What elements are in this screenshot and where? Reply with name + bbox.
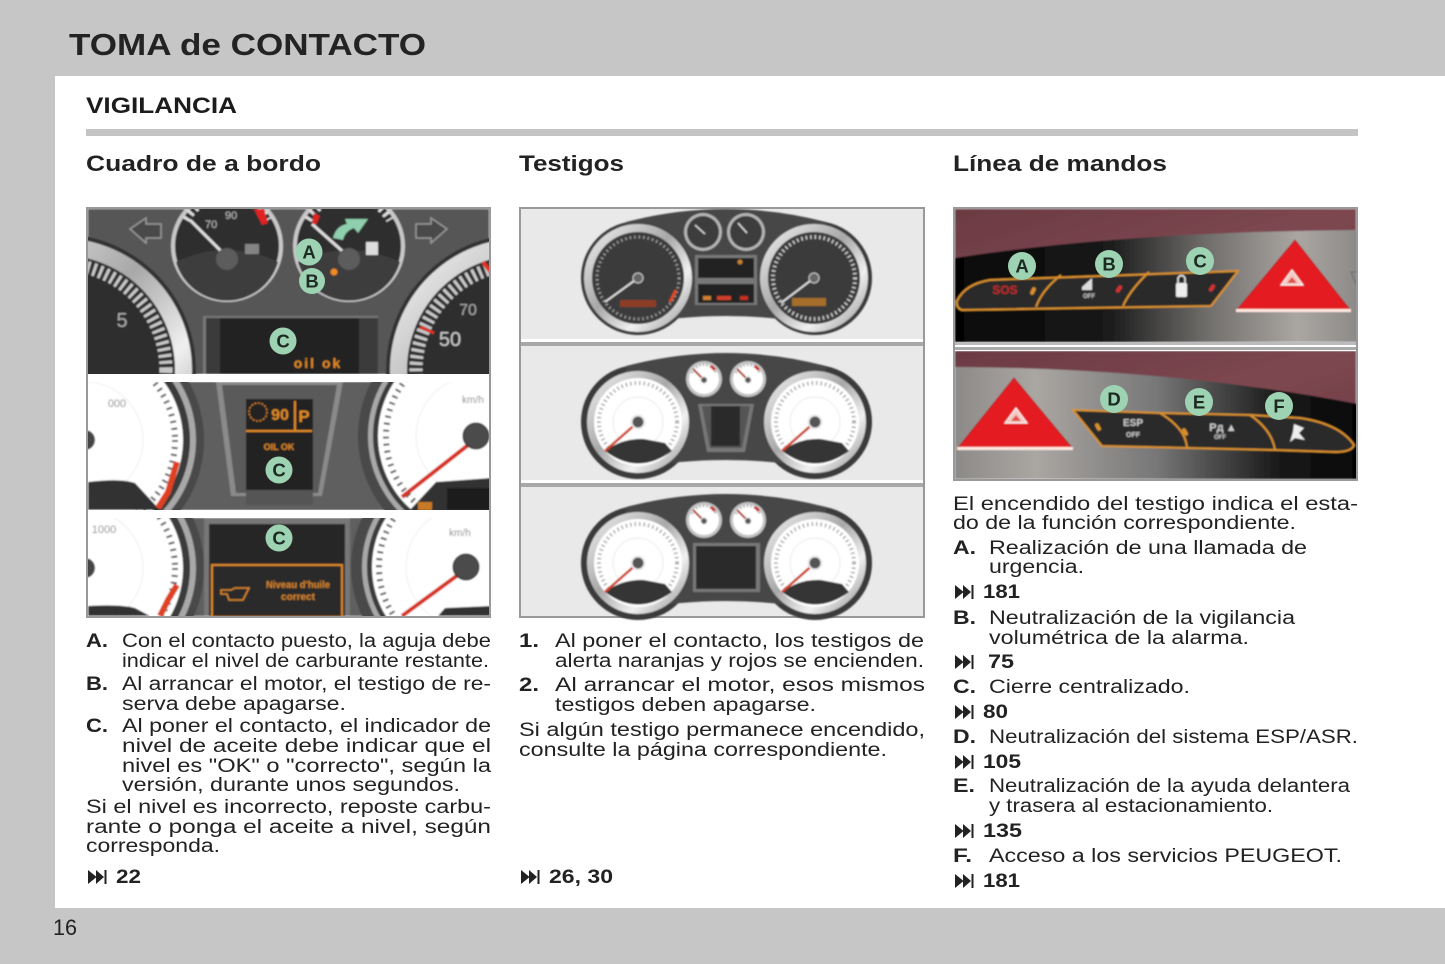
- marker D button: D: [1107, 388, 1121, 410]
- strip: buttons D E F and hazard: [955, 351, 1358, 479]
- item B: vigilancia volumétrica: volumétrica de la alarma.: [989, 627, 1249, 649]
- strip: oil ok display: 000: [108, 398, 126, 410]
- strip: niveau d'huile display: Niveau d'huile: [266, 580, 330, 591]
- page reference: 22: [88, 866, 141, 888]
- text block: cuadro list: indicar el nivel de carburante restante.: [122, 650, 489, 672]
- text block: cuadro list: Con el contacto puesto, la aguja debe: [122, 630, 491, 652]
- marker C middle: C: [272, 460, 286, 480]
- item A: llamada de urgencia: A.: [953, 537, 976, 559]
- text block: cuadro list: rante o ponga el aceite a nivel, según: [86, 816, 491, 838]
- panel: cuadro de a bordo photos: [86, 207, 491, 618]
- cluster 1: dark dials: [581, 209, 872, 335]
- item F: servicios PEUGEOT: Acceso a los servicios PEUGEOT.: [989, 845, 1342, 867]
- strip: analog gauges with A B C: [88, 209, 489, 374]
- marker C top: [270, 328, 296, 354]
- text block: cuadro list: nivel es "OK" o "correcto", según la: [122, 755, 491, 777]
- strip: oil ok display: 90: [271, 407, 289, 424]
- item B: vigilancia volumétrica: 75: [988, 651, 1014, 673]
- item B: vigilancia volumétrica: Neutralización de la vigilancia: [989, 607, 1295, 629]
- item D: ESP/ASR: Neutralización del sistema ESP/ASR.: [989, 726, 1358, 748]
- cluster 3: white dials, large display: [581, 494, 872, 620]
- column heading: línea de mandos: Línea de mandos: [953, 151, 1167, 176]
- item F: servicios PEUGEOT: [953, 845, 1342, 892]
- marker A button: [1008, 252, 1036, 280]
- page title: TOMA de CONTACTO: [69, 28, 426, 62]
- marker D button: [1100, 385, 1128, 413]
- strip: analog gauges with A B C: 90: [225, 210, 237, 222]
- strip: niveau d'huile display: 1000: [92, 524, 116, 536]
- marker C bottom: C: [272, 528, 286, 548]
- marker C middle: [266, 456, 292, 484]
- item F: servicios PEUGEOT: F.: [953, 845, 972, 867]
- text block: mandos intro: do de la función correspondiente.: [953, 512, 1296, 534]
- item A: llamada de urgencia: urgencia.: [989, 556, 1084, 578]
- panel: línea de mandos photos: [954, 208, 1358, 480]
- item A: llamada de urgencia: [953, 537, 1307, 603]
- strip: buttons D E F and hazard: Pд ▲: [1209, 422, 1237, 434]
- item A: llamada de urgencia: Realización de una llamada de: [989, 537, 1307, 559]
- item B: vigilancia volumétrica: B.: [953, 607, 976, 629]
- panel: testigos instrument clusters: [520, 208, 924, 620]
- item B: vigilancia volumétrica: [953, 607, 1295, 673]
- page reference: 22: 22: [116, 866, 141, 888]
- strip: oil ok display: [88, 382, 489, 510]
- cluster 2: white dials, small display: [581, 353, 872, 479]
- text block: testigos list: testigos deben apagarse.: [555, 694, 816, 716]
- marker F button: F: [1273, 396, 1285, 416]
- strip: niveau d'huile display: km/h: [449, 528, 471, 539]
- item E: ayuda al estacionamiento: y trasera al estacionamiento.: [989, 795, 1273, 817]
- item D: ESP/ASR: D.: [953, 726, 976, 748]
- item A: llamada de urgencia: 181: [983, 581, 1020, 603]
- text block: testigos list: Al arrancar el motor, esos mismos: [555, 674, 925, 696]
- text block: cuadro list: versión, durante unos segundos.: [122, 774, 460, 796]
- marker C bottom: [266, 524, 292, 552]
- section heading: VIGILANCIA: [86, 93, 237, 118]
- item E: ayuda al estacionamiento: E.: [953, 775, 975, 797]
- text block: testigos list: Al poner el contacto, los testigos de: [555, 630, 924, 652]
- marker B button: [1095, 250, 1123, 278]
- marker C top: C: [276, 330, 290, 352]
- text block: testigos list: [519, 630, 925, 761]
- strip: buttons A B C and hazard: OFF: [1083, 294, 1095, 300]
- item D: ESP/ASR: 105: [983, 751, 1021, 773]
- strip: buttons A B C and hazard: [955, 209, 1358, 342]
- marker E button: E: [1193, 392, 1205, 412]
- marker B button: B: [1102, 254, 1116, 274]
- marker B: [299, 268, 325, 294]
- strip: buttons D E F and hazard: ESP: [1123, 418, 1143, 429]
- strip: niveau d'huile display: correct: [281, 592, 316, 603]
- item E: ayuda al estacionamiento: Neutralización de la ayuda delantera: [989, 775, 1350, 797]
- text block: cuadro list: serva debe apagarse.: [122, 693, 346, 715]
- item C: cierre centralizado: Cierre centralizado.: [989, 676, 1190, 698]
- text block: mandos intro: El encendido del testigo indica el esta-: [953, 493, 1358, 515]
- marker E button: [1185, 388, 1213, 416]
- strip: niveau d'huile display: [88, 518, 489, 616]
- text block: cuadro list: corresponda.: [86, 835, 220, 857]
- page number: 16: [53, 915, 77, 940]
- marker A: A: [302, 242, 316, 262]
- text block: cuadro list: nivel de aceite debe indicar que el: [122, 735, 491, 757]
- strip: oil ok display: OIL OK: [264, 442, 295, 452]
- marker B: B: [305, 270, 319, 292]
- strip: buttons A B C and hazard: SOS: [992, 283, 1018, 297]
- text block: cuadro list: Al poner el contacto, el indicador de: [122, 715, 491, 737]
- marker C button: [1186, 247, 1214, 275]
- strip: analog gauges with A B C: 70: [459, 302, 477, 319]
- text block: cuadro list: Si el nivel es incorrecto, reposte carbu-: [86, 796, 491, 818]
- text block: cuadro list: Al arrancar el motor, el testigo de re-: [122, 673, 491, 695]
- column heading: testigos: Testigos: [519, 151, 624, 176]
- text block: testigos list: alerta naranjas y rojos se encienden.: [555, 650, 924, 672]
- strip: buttons D E F and hazard: OFF: [1126, 432, 1141, 439]
- item E: ayuda al estacionamiento: [953, 775, 1350, 842]
- text block: cuadro list: A.: [86, 630, 108, 652]
- page reference: 26, 30: [521, 866, 613, 888]
- marker C button: C: [1193, 250, 1207, 272]
- text block: testigos list: 2.: [519, 674, 539, 696]
- page reference: 26, 30: 26, 30: [549, 866, 613, 888]
- item C: cierre centralizado: C.: [953, 676, 976, 698]
- strip: analog gauges with A B C: 70: [205, 219, 217, 231]
- strip: oil ok display: km/h: [462, 395, 484, 406]
- marker A button: A: [1015, 256, 1029, 276]
- strip: oil ok display: P: [298, 407, 310, 426]
- text block: testigos list: 1.: [519, 630, 539, 652]
- marker F button: [1265, 392, 1293, 420]
- strip: analog gauges with A B C: oil ok: [294, 355, 342, 371]
- strip: analog gauges with A B C: 5: [116, 310, 128, 332]
- item D: ESP/ASR: [953, 726, 1358, 773]
- item F: servicios PEUGEOT: 181: [983, 870, 1020, 892]
- column heading: cuadro: Cuadro de a bordo: [86, 151, 321, 176]
- text block: cuadro list: B.: [86, 673, 108, 695]
- item C: cierre centralizado: [953, 676, 1190, 723]
- text block: cuadro list: [86, 630, 491, 857]
- text block: cuadro list: C.: [86, 715, 108, 737]
- marker A: [296, 238, 322, 266]
- text block: testigos list: Si algún testigo permanece encendido,: [519, 719, 925, 741]
- item C: cierre centralizado: 80: [983, 701, 1008, 723]
- text block: mandos intro: [953, 493, 1358, 534]
- text block: testigos list: consulte la página correspondiente.: [519, 739, 887, 761]
- strip: buttons D E F and hazard: OFF: [1214, 435, 1226, 441]
- strip: analog gauges with A B C: 50: [439, 329, 461, 351]
- item E: ayuda al estacionamiento: 135: [983, 820, 1022, 842]
